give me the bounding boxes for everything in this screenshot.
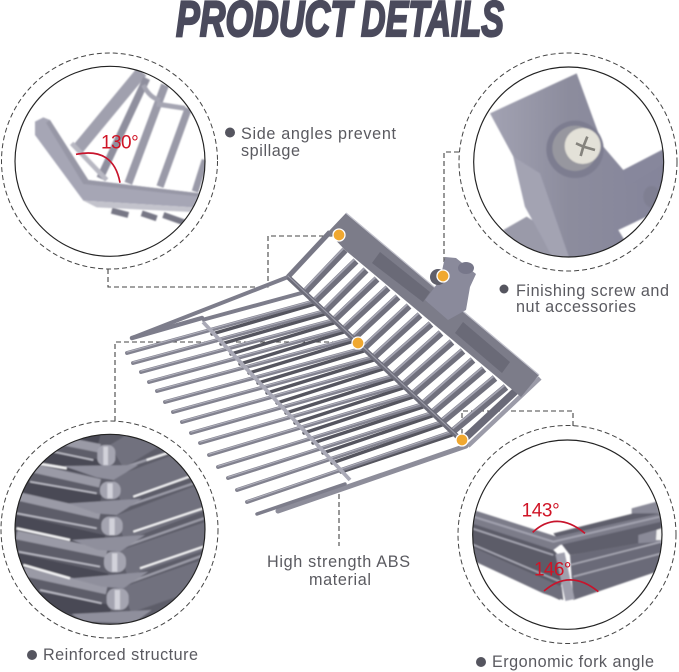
label: finishing screw: nut accessories — [516, 298, 636, 316]
label: finishing screw: Finishing screw and — [516, 282, 669, 300]
connector: side angle callout — [108, 236, 335, 287]
panel: fork angle detail circle — [458, 426, 676, 644]
label: finishing screw — [500, 282, 669, 316]
angle arc 146 — [544, 580, 598, 592]
label: reinforced structure: Reinforced structure — [43, 646, 198, 664]
panel: side angles detail circle — [2, 53, 218, 269]
label: side angles: Side angles prevent — [241, 125, 396, 143]
marker dots — [333, 229, 468, 446]
fork side bars — [132, 232, 540, 514]
fork head plate — [328, 213, 539, 397]
connector: reinforced structure callout — [115, 342, 355, 421]
fork handle socket — [425, 257, 476, 320]
label: ABS material: High strength ABS — [267, 553, 410, 571]
label: side angles: spillage — [241, 142, 300, 160]
angle label 130: 130° — [101, 133, 139, 154]
label: side angles — [225, 125, 396, 160]
connector: ABS material callout — [338, 486, 340, 546]
angle arc 143 — [533, 521, 585, 533]
label: ABS material: material — [309, 571, 371, 589]
angle label 143: 143° — [522, 501, 560, 522]
fork product illustration — [127, 213, 540, 514]
label: ergonomic fork angle: Ergonomic fork angle — [492, 653, 654, 671]
connector: fork angle callout — [462, 411, 573, 437]
panel: reinforced structure detail circle — [1, 413, 218, 638]
fork lower tines — [127, 300, 452, 502]
fork upper tines — [303, 248, 506, 432]
angle label 146: 146° — [534, 560, 571, 581]
angle arc 130 — [76, 153, 120, 183]
panel: screw detail circle — [459, 53, 677, 271]
fork cross bars — [203, 276, 462, 480]
connector: screw callout — [444, 152, 459, 270]
label: ABS material — [267, 553, 410, 589]
